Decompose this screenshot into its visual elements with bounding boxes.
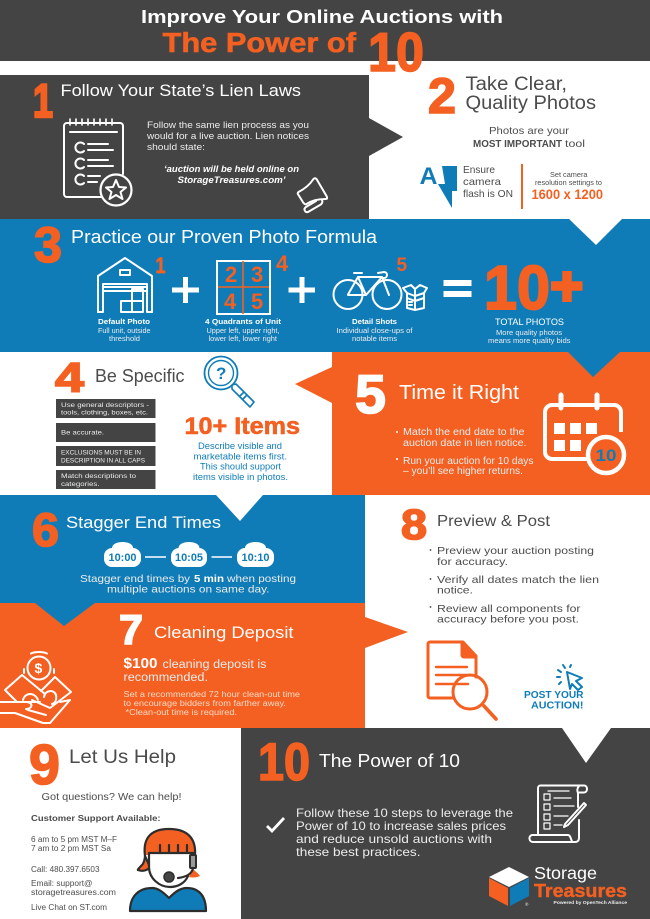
equals sign (444, 283, 472, 294)
preview bullets: Preview your auction posting (437, 545, 594, 557)
default photo caption: Default Photo (98, 317, 150, 326)
icon: magnifier question: ? (216, 364, 226, 383)
tip box: match categories: categories. (61, 481, 100, 488)
detail shots caption: Individual close-ups of (336, 328, 413, 335)
step 9 number: 9 (29, 733, 60, 797)
post your auction label: POST YOUR (524, 689, 584, 701)
icon: four quadrants: 2 (225, 262, 237, 287)
tip box: exclusions: DESCRIPTION IN ALL CAPS (61, 458, 145, 464)
panel: step 1 lien laws (0, 74, 403, 219)
icon: scroll checklist (529, 786, 587, 842)
preview bullets: Verify all dates match the lien (437, 574, 599, 586)
icon: open box (403, 285, 427, 310)
timing bullets: Match the end date to the (403, 427, 525, 438)
step 7 number: 7 (119, 606, 143, 653)
flash tip text (463, 164, 513, 200)
summary text (296, 806, 513, 859)
step 8 number: 8 (401, 501, 427, 549)
flash tip text: Ensure (463, 164, 495, 176)
step 10 heading: The Power of 10 (319, 751, 460, 771)
logo: storage treasures: Storage (534, 863, 597, 883)
preview bullets: notice. (437, 584, 473, 596)
contact details: Live Chat on ST.com (31, 903, 107, 912)
camera resolution tip: 1600 x 1200 (532, 187, 603, 202)
timing bullets: auction date in lien notice. (403, 438, 526, 449)
title line one: Improve Your Online Auctions with (141, 7, 503, 27)
step 3 number: 3 (34, 217, 62, 273)
panel: step 9 let us help (29, 733, 206, 912)
camera resolution tip (532, 172, 603, 202)
step 6 number: 6 (32, 503, 59, 556)
total photos caption: TOTAL PHOTOS (495, 317, 564, 327)
icon: cursor click (557, 665, 582, 690)
preview bullets: for accuracy. (437, 556, 508, 568)
preview bullets: Review all components for (437, 603, 581, 615)
tip box: general descriptors: tools, clothing, boxes, etc. (61, 410, 148, 416)
time pill 10:10 (237, 542, 274, 567)
total photos caption (488, 317, 571, 345)
items description (193, 441, 288, 483)
step 4 number: 4 (55, 354, 85, 401)
panel: step 10 the power of 10 (241, 728, 650, 919)
small number 4: 4 (276, 251, 289, 276)
items description: items visible in photos. (193, 472, 288, 483)
contact details: storagetreasures.com (31, 888, 116, 897)
icon: megaphone (298, 178, 327, 212)
default photo caption: threshold (109, 336, 140, 343)
quadrants caption: 4 Quadrants of Unit (205, 317, 282, 326)
step 1 number: 1 (33, 74, 53, 127)
step 5 number: 5 (355, 363, 386, 425)
contact details: Email: support@ (31, 879, 92, 888)
icon: four quadrants (217, 261, 270, 314)
quadrants caption: lower left, lower right (208, 336, 277, 343)
items description: marketable items first. (194, 452, 287, 462)
flash tip text: flash is ON (463, 188, 513, 200)
support hours: 7 am to 2 pm MST Sa (31, 844, 112, 853)
tip box: exclusions: EXCLUSIONS MUST BE IN (61, 450, 141, 456)
stagger description: Stagger end times by (80, 573, 191, 585)
total photos caption: More quality photos (496, 330, 563, 337)
photos importance text: tool (565, 138, 585, 150)
items description: Describe visible and (198, 441, 282, 452)
quadrants caption: Upper left, upper right, (206, 328, 280, 335)
default photo caption (98, 317, 151, 343)
detail shots caption: notable items (352, 336, 398, 343)
timing bullets: – you’ll see higher returns. (403, 466, 523, 477)
detail shots caption: Detail Shots (352, 317, 397, 326)
10+ items callout: 10+ Items (184, 413, 300, 440)
tip box: general descriptors: Use general descriptors - (61, 402, 149, 409)
panel: step 2 photos (420, 68, 603, 209)
lien notice quote: ‘auction will be held online on (164, 164, 299, 175)
icon: flash (420, 163, 457, 208)
icon: four quadrants: 5 (251, 289, 263, 314)
tip box: be accurate: Be accurate. (61, 430, 104, 436)
10+ total: 10 (484, 254, 550, 323)
lien process text: Follow the same lien process as you (147, 120, 309, 131)
total photos caption: means more quality bids (488, 338, 571, 345)
step 2 heading: Take Clear, (466, 74, 567, 95)
photos importance text (473, 125, 585, 150)
panel: step 3 photo formula (0, 217, 650, 352)
step 3 heading: Practice our Proven Photo Formula (71, 227, 378, 247)
logo: storage treasures (489, 863, 627, 907)
icon: four quadrants: 3 (251, 262, 263, 287)
icon: four quadrants: 4 (224, 289, 237, 314)
deposit amount text (124, 656, 267, 684)
step 6 heading: Stagger End Times (66, 513, 221, 532)
questions line: Got questions? We can help! (42, 792, 182, 803)
header banner (0, 0, 650, 83)
icon: storage unit (98, 258, 152, 312)
time pill 10:00: 10:00 (108, 552, 136, 564)
stagger description (80, 573, 296, 596)
icon: support agent (130, 829, 206, 911)
icon: calendar: 10 (596, 446, 616, 465)
stagger description: multiple auctions on same day. (107, 584, 270, 596)
lien process text: would for a live auction. Lien notices (146, 131, 309, 142)
timing bullets (396, 427, 534, 477)
icon: check mark (267, 818, 284, 831)
time pill 10:00 (104, 542, 141, 567)
summary text: these best practices. (296, 845, 420, 859)
logo: storage treasures: Treasures (534, 880, 627, 901)
logo: storage treasures: Powered by OpenTech Alliance (554, 900, 627, 906)
contact details (31, 865, 116, 912)
deposit amount text: cleaning deposit is (162, 659, 267, 671)
title line two: The Power of (162, 27, 357, 58)
step 9 heading: Let Us Help (69, 746, 176, 768)
summary text: and reduce unsold auctions with (296, 832, 492, 846)
camera resolution tip: resolution settings to (535, 180, 602, 187)
deposit amount text: $100 (124, 656, 158, 672)
time pill 10:05: 10:05 (175, 552, 203, 564)
contact details: Call: 480.397.6503 (31, 865, 100, 874)
quadrants caption (205, 317, 282, 343)
icon: document with magnifier (428, 642, 496, 719)
panel: step 4 be specific (55, 354, 300, 489)
panel: step 8 preview and post (401, 501, 599, 719)
post your auction label (524, 689, 584, 712)
step 8 heading: Preview & Post (437, 513, 551, 530)
step 4 heading: Be Specific (95, 366, 184, 386)
lien notice quote (164, 164, 299, 186)
lien process text (146, 120, 309, 153)
step 7 heading: Cleaning Deposit (154, 623, 294, 642)
tip box: match categories (56, 470, 156, 489)
summary text: Power of 10 to increase sales prices (296, 819, 506, 833)
step 10 number: 10 (258, 733, 310, 792)
small number 1: 1 (156, 253, 166, 278)
tip box: general descriptors (56, 399, 156, 418)
icon: hand holding money (0, 652, 71, 723)
time pill 10:10: 10:10 (242, 552, 270, 564)
panel: step 6 stagger end times (0, 495, 365, 603)
tip box: exclusions (56, 446, 156, 466)
step 5 heading: Time it Right (399, 382, 519, 404)
icon: hand holding money: $ (34, 660, 42, 676)
items description: This should support (200, 462, 281, 472)
summary text: Follow these 10 steps to leverage the (296, 806, 513, 820)
icon: checklist with star (64, 119, 132, 206)
plus sign two (288, 277, 315, 303)
detail shots caption (336, 317, 413, 343)
stagger description: 5 min (194, 573, 224, 585)
deposit amount text: recommended. (124, 672, 208, 684)
tip box: match categories: Match descriptions to (61, 473, 136, 480)
clean-out note: to encourage bidders from farther away. (124, 699, 286, 708)
timing bullets: Run your auction for 10 days (403, 456, 534, 467)
lien process text: should state: (147, 142, 205, 153)
camera resolution tip: Set camera (550, 172, 588, 179)
step 2 heading: Quality Photos (466, 93, 596, 114)
small number 5: 5 (396, 255, 408, 276)
clean-out note: *Clean-out time is required. (126, 708, 237, 717)
time pill 10:05 (171, 542, 207, 567)
icon: bicycle (334, 272, 402, 309)
icon: flash: A (420, 163, 438, 190)
lien notice quote: StorageTreasures.com’ (178, 175, 286, 186)
support hours: 6 am to 5 pm MST M–F (31, 835, 117, 844)
step 2 heading (466, 74, 596, 114)
default photo caption: Full unit, outside (98, 328, 151, 335)
icon: calendar (545, 395, 624, 473)
step 1 heading: Follow Your State’s Lien Laws (60, 81, 301, 100)
clean-out note (124, 690, 301, 717)
photos importance text: Photos are your (489, 125, 570, 137)
preview bullets (430, 545, 599, 626)
stagger description: when posting (226, 573, 296, 585)
support hours (31, 835, 117, 853)
photos importance text: MOST IMPORTANT (473, 138, 563, 150)
panel: step 7 cleaning deposit (0, 603, 408, 728)
logo: storage treasures: ® (525, 901, 529, 907)
tip box: be accurate (56, 423, 156, 442)
icon: magnifier question (204, 356, 254, 407)
clean-out note: Set a recommended 72 hour clean-out time (124, 690, 301, 699)
step 2 number: 2 (428, 68, 456, 124)
flash tip text: camera (463, 176, 501, 188)
title big 10: 10 (368, 21, 424, 83)
plus sign one (172, 277, 199, 303)
preview bullets: accuracy before you post. (437, 614, 579, 626)
post your auction label: AUCTION! (531, 700, 584, 712)
panel: step 5 time it right (295, 352, 650, 495)
support heading: Customer Support Available: (31, 813, 161, 823)
